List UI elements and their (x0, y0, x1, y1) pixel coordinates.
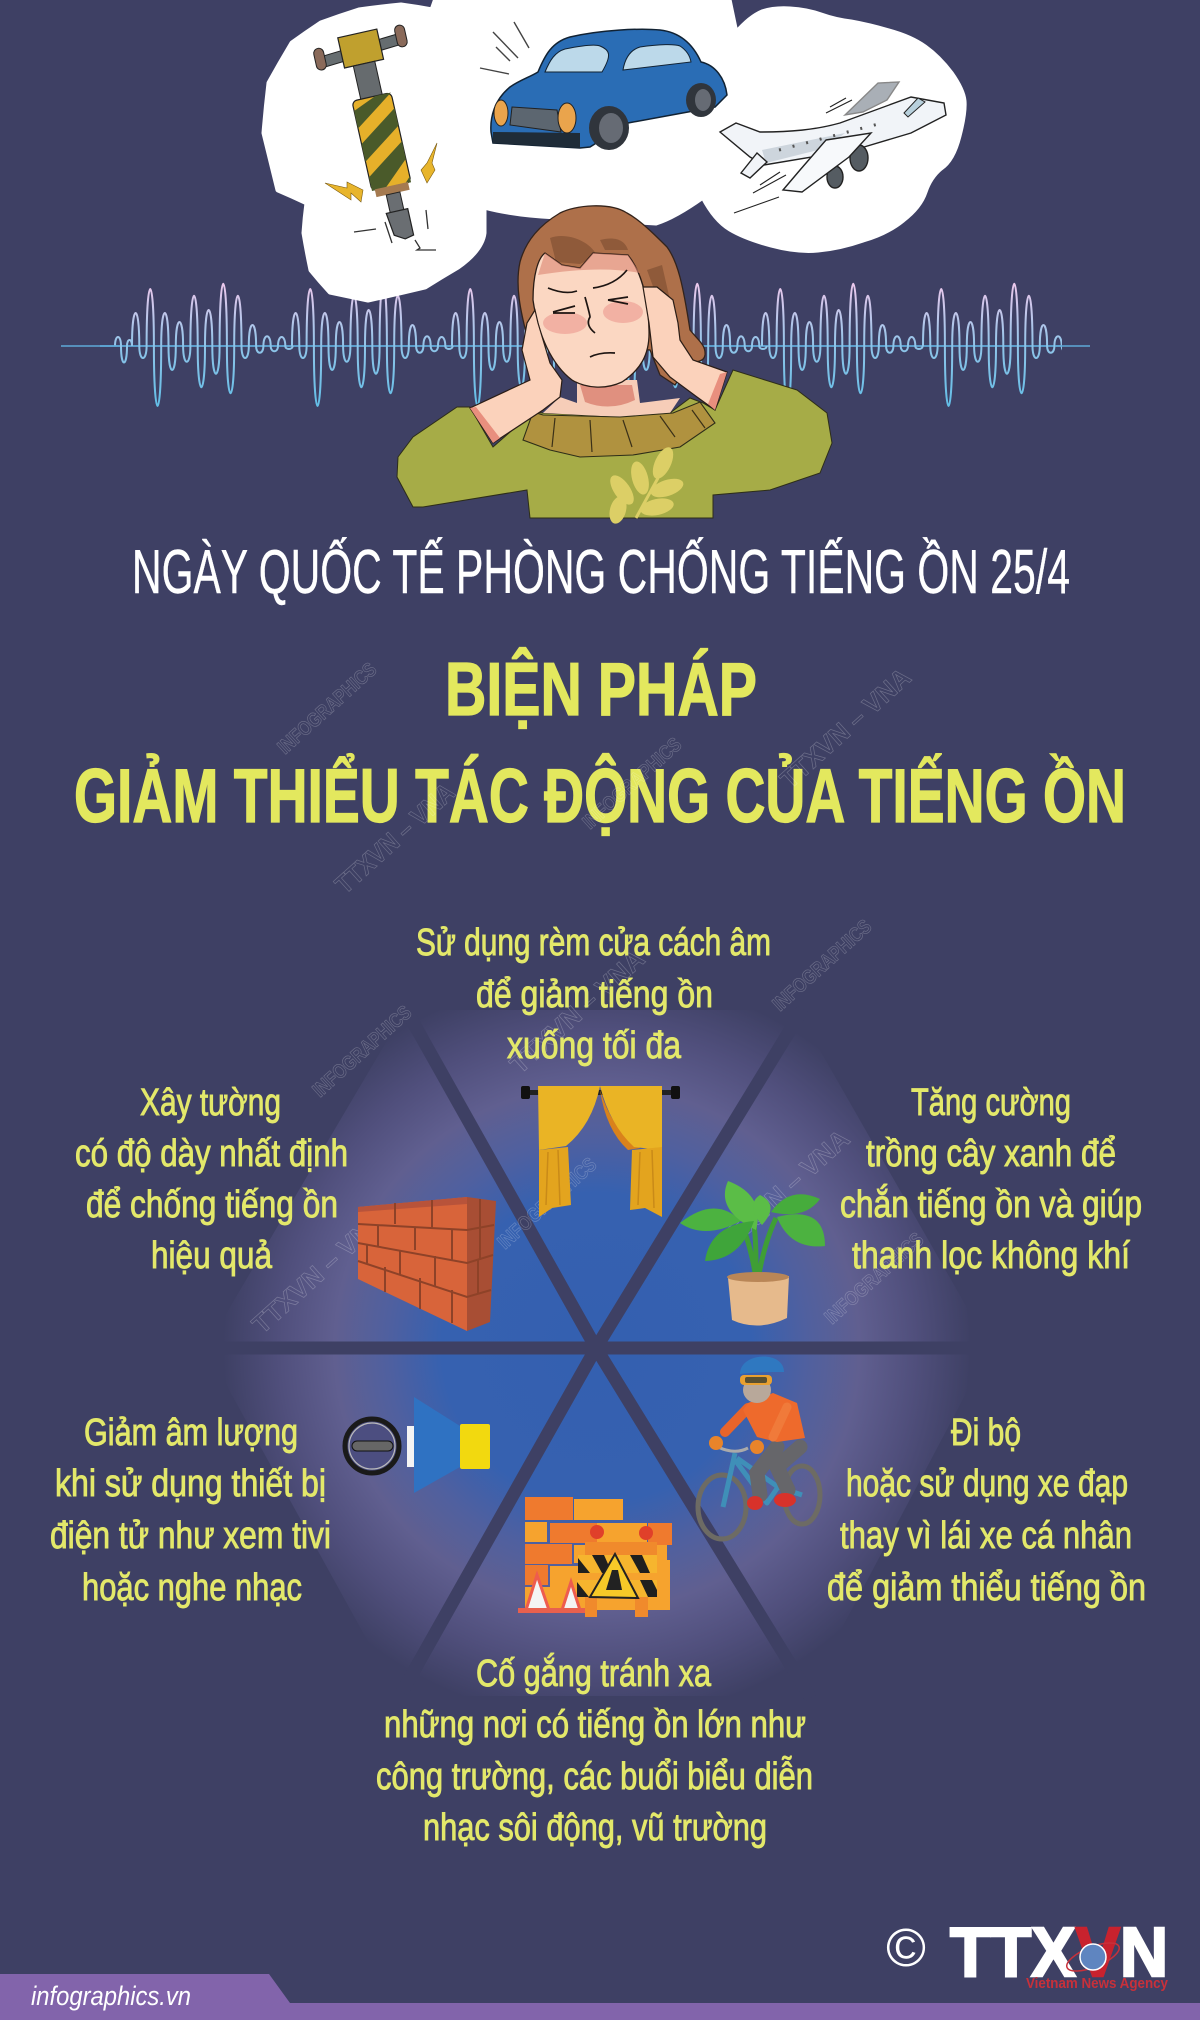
watermarks: TTXVN – VNA (774, 662, 917, 794)
icon: jackhammer (311, 23, 449, 250)
text: lower left measure: khi sử dụng thiết bị (55, 1463, 326, 1505)
text: upper right measure: Tăng cường (911, 1082, 1071, 1124)
text: top measure: để giảm tiếng ồn (476, 974, 713, 1016)
text: lower right measure (827, 1412, 1146, 1609)
forehead shade (538, 253, 640, 275)
watermarks: INFOGRAPHICS (494, 1154, 601, 1254)
waveform baseline ends (61, 345, 1090, 347)
icon: brick wall (358, 1197, 496, 1331)
girl cheek left (543, 312, 587, 334)
girl left arm and hand (470, 310, 562, 443)
arm cuff shading (470, 372, 727, 443)
watermarks: INFOGRAPHICS (821, 1229, 928, 1329)
text: lower left measure (50, 1412, 331, 1609)
sweater leaf (606, 444, 686, 526)
logo: TTXVN: Vietnam News Agency (1026, 1975, 1169, 1992)
text: lower left measure: hoặc nghe nhạc (82, 1567, 302, 1609)
logo: TTXVN: TTXVN (950, 1913, 1168, 1991)
watermarks (246, 659, 928, 1339)
girl cheek right (603, 301, 643, 323)
text: upper right measure: trồng cây xanh để (866, 1133, 1116, 1175)
watermarks: TTXVN – VNA (709, 1123, 856, 1259)
girl facial features (548, 270, 628, 357)
icon: curtain (521, 1086, 680, 1217)
text: upper right measure: thanh lọc không khí (852, 1235, 1130, 1277)
girl sweater collar (523, 402, 715, 457)
watermarks: INFOGRAPHICS (309, 1002, 416, 1102)
text: top measure: Sử dụng rèm cửa cách âm (416, 922, 771, 964)
text: bottom measure (376, 1652, 813, 1849)
text: upper right measure: chắn tiếng ồn và giúp (840, 1183, 1142, 1226)
text: bottom measure: Cố gắng tránh xa (476, 1652, 712, 1695)
text: top measure (416, 922, 771, 1067)
text: lower right measure: Đi bộ (951, 1412, 1021, 1454)
text: lower right measure: thay vì lái xe cá nhân (840, 1515, 1132, 1557)
girl hair shading (550, 236, 670, 300)
text: lower right measure: hoặc sử dụng xe đạp (846, 1463, 1128, 1505)
icon: jackhammer sparks (325, 143, 437, 250)
watermarks: TTXVN – VNA (329, 777, 461, 899)
text: lower left measure: điện tử như xem tivi (50, 1515, 331, 1557)
watermarks: TTXVN – VNA (246, 1203, 393, 1339)
girl right arm and hand (643, 287, 727, 410)
text: upper left measure (75, 1082, 348, 1277)
watermarks: INFOGRAPHICS (579, 734, 686, 834)
icon: potted plant (680, 1181, 825, 1326)
icon: volume speaker (345, 1397, 490, 1493)
text: bottom measure: nhạc sôi động, vũ trường (423, 1807, 767, 1849)
icon: cyclist (698, 1356, 820, 1539)
girl neck (543, 380, 680, 417)
watermarks: TTXVN – VNA (504, 943, 651, 1079)
watermarks: INFOGRAPHICS (769, 916, 876, 1016)
text: upper right measure (840, 1082, 1142, 1277)
text: upper left measure: hiệu quả (151, 1235, 273, 1277)
text: bottom measure: công trường, các buổi biểu diễn (376, 1755, 813, 1798)
heading (74, 647, 1126, 839)
collar ribs (552, 410, 705, 452)
girl face (533, 253, 649, 387)
text: upper left measure: để chống tiếng ồn (86, 1184, 338, 1226)
hexagon diagram (242, 1010, 952, 1696)
text: upper left measure: có độ dày nhất định (75, 1133, 348, 1175)
text: upper left measure: Xây tường (140, 1082, 281, 1124)
illustration: girl covering ears (397, 206, 832, 526)
text: top measure: xuống tối đa (507, 1025, 682, 1067)
copyright mark: © (886, 1918, 926, 1978)
girl neck shadow (580, 385, 635, 407)
girl sweater (397, 370, 832, 518)
heading: BIỆN PHÁP (445, 647, 757, 731)
text: bottom measure: những nơi có tiếng ồn lớn như (384, 1704, 806, 1746)
icon: construction barrier (518, 1497, 672, 1617)
icon: airplane (720, 82, 946, 213)
text: lower right measure: để giảm thiểu tiếng ồn (827, 1567, 1146, 1609)
text: lower left measure: Giảm âm lượng (84, 1412, 298, 1454)
girl hair (518, 206, 705, 385)
thought cloud (264, 0, 964, 300)
sound waveform (61, 284, 1090, 406)
footer website: infographics.vn (31, 1981, 191, 2011)
icon: car (480, 22, 727, 150)
footer band (0, 1974, 1200, 2020)
watermarks: INFOGRAPHICS (274, 659, 381, 759)
